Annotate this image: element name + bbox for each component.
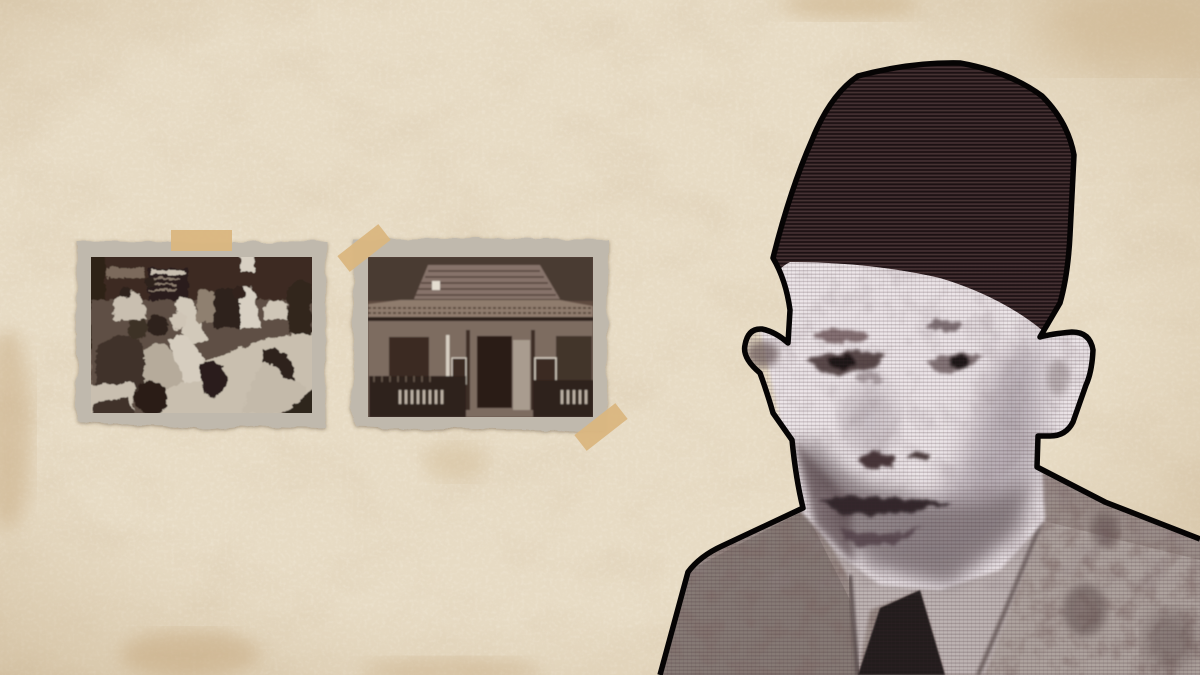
facial features bbox=[806, 320, 985, 546]
jacket bbox=[662, 472, 1200, 675]
fez cap bbox=[765, 58, 1080, 330]
photo frame: meeting bbox=[75, 241, 326, 429]
nose bbox=[858, 453, 929, 469]
photograph: house bbox=[368, 257, 593, 417]
necktie bbox=[858, 590, 945, 675]
right brow and eye bbox=[925, 320, 985, 372]
tape: top-left of house photo bbox=[337, 224, 391, 272]
photo: meeting around a table bbox=[75, 230, 326, 429]
left brow and eye bbox=[806, 329, 884, 383]
photograph: meeting scene bbox=[91, 257, 312, 413]
tape: top of meeting photo bbox=[171, 230, 232, 251]
mouth bbox=[820, 497, 950, 546]
halftone texture over figure bbox=[650, 262, 1200, 675]
face and ears bbox=[747, 262, 1090, 592]
photo frame: house bbox=[351, 238, 608, 432]
black cut-out outline bbox=[660, 63, 1200, 675]
photo: house with fence bbox=[337, 224, 628, 451]
portrait: man wearing a peci cap bbox=[650, 58, 1200, 675]
shirt collar and neck bbox=[828, 521, 1044, 675]
tape: bottom-right of house photo bbox=[574, 403, 628, 451]
